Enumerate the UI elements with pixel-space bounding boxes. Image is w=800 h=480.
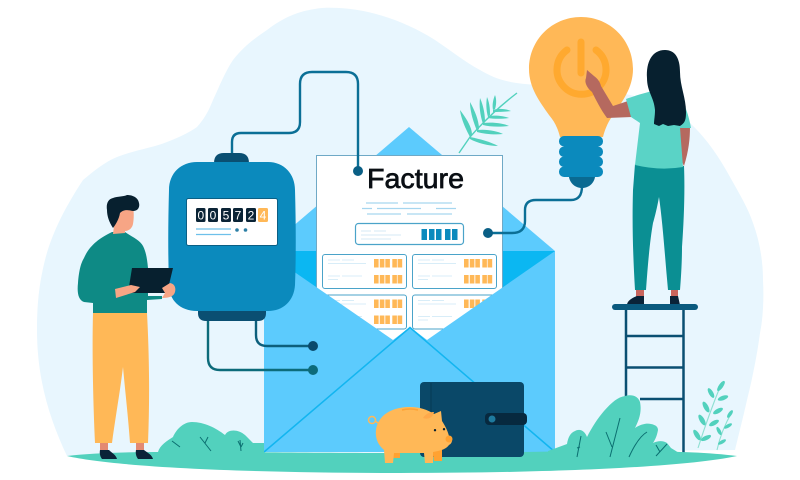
man shoes — [100, 450, 153, 459]
man sweater — [78, 232, 162, 313]
meter display — [186, 198, 278, 246]
wallet strap — [485, 413, 527, 425]
meter display: 4 — [260, 208, 267, 222]
amount bar — [356, 224, 464, 244]
wire: meter to second dot — [208, 318, 313, 370]
bulb tip — [569, 177, 595, 188]
wire dot: invoice title — [353, 166, 363, 176]
tablet — [128, 268, 173, 293]
invoice card 3 — [322, 295, 406, 329]
ground — [67, 451, 737, 473]
shoes — [627, 296, 680, 305]
leaf — [459, 93, 517, 153]
first wire dot — [308, 341, 318, 351]
pig coin slot — [402, 409, 418, 410]
pig tail — [368, 416, 376, 424]
bulb screw base — [559, 136, 603, 177]
long hair — [647, 50, 686, 126]
bush right — [548, 395, 684, 457]
wallet button — [488, 416, 496, 422]
feet — [636, 288, 678, 298]
invoice card 1 — [322, 254, 406, 288]
envelope — [264, 127, 555, 452]
meter display: 0 — [210, 208, 217, 222]
trousers — [633, 164, 684, 290]
meter body — [168, 162, 296, 311]
woman — [585, 50, 691, 305]
man hands — [115, 283, 175, 298]
meter display: 2 — [248, 208, 255, 222]
meter top cap — [214, 153, 249, 163]
man — [78, 195, 175, 459]
power icon — [557, 42, 606, 94]
meter display: 5 — [223, 208, 230, 222]
man hair — [107, 195, 139, 228]
pig tail link — [375, 421, 381, 425]
far arm — [680, 126, 690, 166]
bulb glass — [529, 17, 633, 137]
wire: meter to invoice — [232, 72, 358, 171]
shirt — [626, 91, 691, 169]
invoice card 4 — [412, 295, 496, 329]
envelope interior — [264, 251, 555, 351]
envelope back flap — [264, 127, 555, 251]
text lines — [362, 203, 456, 214]
meter bottom cap — [198, 309, 266, 321]
meter display: 7 — [235, 208, 242, 222]
invoice card 2 — [412, 254, 496, 288]
man legs — [93, 313, 149, 443]
wire dot: invoice amount — [483, 228, 493, 238]
envelope bottom flap lines — [264, 328, 555, 452]
wire: meter to first dot — [256, 318, 313, 346]
invoice document — [316, 156, 502, 346]
pig body — [376, 407, 452, 463]
fern — [692, 380, 734, 450]
piggy bank — [368, 407, 452, 463]
light bulb — [529, 17, 633, 188]
wallet — [420, 382, 527, 457]
man ankles — [100, 443, 144, 452]
bush left — [158, 422, 264, 456]
ladder — [612, 304, 698, 454]
man neck and face — [113, 206, 134, 234]
electric meter — [168, 153, 296, 321]
pig far feet — [392, 450, 442, 461]
ladder platform — [612, 304, 698, 310]
second wire dot — [308, 365, 318, 375]
pig snout — [446, 436, 452, 442]
title: Facture — [367, 163, 464, 194]
raised arm — [585, 70, 632, 118]
pig ear — [423, 412, 434, 419]
wire: bulb to invoice — [488, 186, 582, 233]
pig eyes — [434, 428, 445, 431]
envelope left and right flaps — [264, 251, 555, 452]
meter display: 0 — [197, 208, 204, 222]
